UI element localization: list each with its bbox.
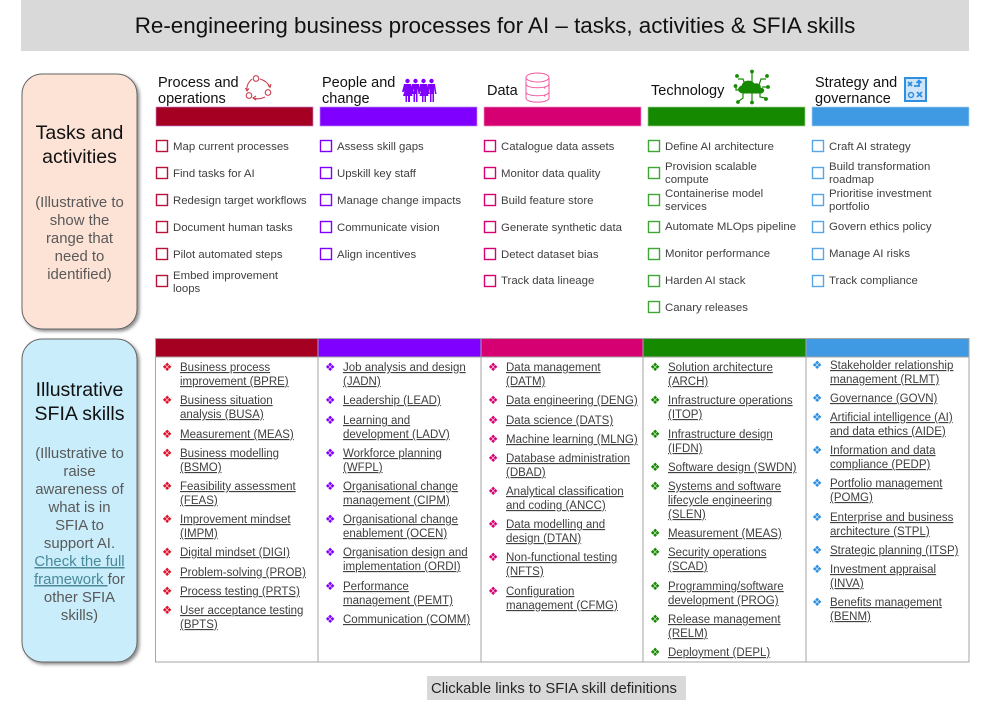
skills list: people and change: ❖	[325, 612, 335, 626]
skills list: strategy and governance: architecture (STPL)	[830, 526, 930, 538]
skills list: process and operations: ❖	[162, 603, 172, 617]
task list: process and operations: Find tasks for AI	[173, 168, 255, 180]
skills list: strategy and governance: compliance (PEDP)	[830, 459, 931, 471]
skills list: strategy and governance: Information and data	[830, 445, 936, 457]
panel: tasks and activities label	[22, 74, 137, 329]
skills list: strategy and governance: (POMG)	[830, 492, 873, 504]
skills list: strategy and governance: ❖	[812, 443, 822, 457]
skills list: data: Non-functional testing	[506, 552, 617, 564]
task list: data: Catalogue data assets	[501, 141, 615, 153]
skills list: people and change: Workforce planning	[343, 448, 442, 460]
colour bar: data	[484, 107, 641, 126]
skills list: process and operations: Improvement mindset	[180, 514, 291, 526]
task list: process and operations: loops	[173, 283, 201, 295]
skills list: technology: ❖	[650, 460, 660, 474]
skills list: technology: ❖	[650, 360, 660, 374]
task list: strategy and governance: Build transformation	[829, 161, 930, 173]
task list: people and change: Assess skill gaps	[337, 141, 424, 153]
skills list: technology	[650, 360, 797, 659]
skills list: technology: (ARCH)	[668, 376, 708, 388]
skills list: technology: Software design (SWDN)	[668, 462, 797, 474]
panel: illustrative SFIA skills label: what is in	[47, 500, 111, 516]
skills list: data: Analytical classification	[506, 486, 624, 498]
skills list: data: ❖	[488, 393, 498, 407]
task list: data: Detect dataset bias	[501, 249, 599, 261]
skills list: technology: (IFDN)	[668, 443, 703, 455]
panel: illustrative SFIA skills label: (Illustrative to	[35, 446, 124, 462]
skills list: technology: Measurement (MEAS)	[668, 528, 782, 540]
task list: process and operations: Embed improvement	[173, 270, 279, 282]
skills list: people and change: ❖	[325, 545, 335, 559]
skills list: data: Configuration	[506, 586, 574, 598]
skills list: technology: Programming/software	[668, 581, 784, 593]
skills list: people and change: development (LADV)	[343, 429, 450, 441]
colour bar: strategy	[812, 107, 969, 126]
skills list: strategy and governance: (INVA)	[830, 578, 864, 590]
task list: technology: Provision scalable	[665, 161, 757, 173]
panel: illustrative SFIA skills label: SFIA to	[55, 518, 104, 534]
task list: strategy and governance: Manage AI risks	[829, 248, 910, 260]
task list: people and change: Upskill key staff	[337, 168, 417, 180]
skills list: strategy and governance: ❖	[812, 562, 822, 576]
skills list: technology: ❖	[650, 545, 660, 559]
skills list: strategy and governance: Artificial intelligence (AI)	[830, 412, 953, 424]
task list: strategy and governance	[812, 140, 932, 287]
heading: people and change	[322, 75, 395, 107]
skills list: people and change	[325, 360, 470, 626]
skills table frame	[156, 338, 969, 662]
task list: technology: compute	[665, 174, 709, 186]
skills list: people and change: ❖	[325, 446, 335, 460]
task list: data	[484, 140, 623, 287]
skills list: technology: ❖	[650, 393, 660, 407]
skills list: strategy and governance: ❖	[812, 410, 822, 424]
heading: process and operations: operations	[158, 91, 226, 107]
skills list: strategy and governance: Investment appraisal	[830, 564, 936, 576]
task list: strategy and governance: Craft AI strategy	[829, 141, 911, 153]
skills list: process and operations: ❖	[162, 393, 172, 407]
footer note: Clickable links to SFIA skill definitions	[431, 681, 677, 697]
skills list: process and operations: improvement (BPRE)	[180, 376, 289, 388]
skills list: process and operations: ❖	[162, 512, 172, 526]
skills list: strategy and governance: Stakeholder relationship	[830, 360, 953, 372]
heading: process and operations	[158, 75, 239, 107]
skills list: process and operations: (BSMO)	[180, 462, 222, 474]
icon: people	[402, 79, 436, 102]
skills list: process and operations: (FEAS)	[180, 495, 218, 507]
skills list: process and operations: (BPTS)	[180, 619, 218, 631]
heading: people and change: People and	[322, 75, 395, 91]
skills list: process and operations: Measurement (MEAS)	[180, 429, 294, 441]
task list: process and operations	[156, 140, 307, 295]
skills list: process and operations: ❖	[162, 545, 172, 559]
task list: process and operations: Redesign target workflows	[173, 195, 307, 207]
skills list: data: Data science (DATS)	[506, 415, 613, 427]
skills list: technology: Release management	[668, 614, 781, 626]
skills list: technology: (RELM)	[668, 628, 708, 640]
skills list: data: ❖	[488, 432, 498, 446]
task list: people and change: Align incentives	[337, 249, 416, 261]
skills list: process and operations: Feasibility assessment	[180, 481, 296, 493]
skills list: process and operations: ❖	[162, 360, 172, 374]
skills list: data: (DBAD)	[506, 467, 546, 479]
skills list: data: ❖	[488, 484, 498, 498]
skills list: process and operations: analysis (BUSA)	[180, 409, 264, 421]
skills list: people and change: ❖	[325, 579, 335, 593]
task list: technology: Containerise model	[665, 188, 763, 200]
skills list: people and change: implementation (ORDI)	[343, 561, 461, 573]
skills list: technology: ❖	[650, 479, 660, 493]
skills list: technology: Infrastructure operations	[668, 395, 793, 407]
task list: technology: services	[665, 201, 707, 213]
skills list: data: ❖	[488, 413, 498, 427]
skills list: technology: Infrastructure design	[668, 429, 773, 441]
panel: illustrative SFIA skills label: raise	[63, 464, 96, 480]
skills list: technology: Security operations	[668, 547, 767, 559]
task list: technology: Automate MLOps pipeline	[665, 221, 796, 233]
skills list: data: Data modelling and	[506, 519, 605, 531]
skills list: people and change: ❖	[325, 360, 335, 374]
skills list: people and change: ❖	[325, 393, 335, 407]
task list: people and change: Communicate vision	[337, 222, 440, 234]
skills list: data: ❖	[488, 550, 498, 564]
task list: data: Track data lineage	[501, 275, 594, 287]
skills list: strategy and governance: management (RLMT)	[830, 374, 939, 386]
heading: process and operations: Process and	[158, 75, 239, 91]
skills list: data: (DATM)	[506, 376, 546, 388]
skills list: data: ❖	[488, 584, 498, 598]
skills list: technology: Deployment (DEPL)	[668, 647, 770, 659]
heading: strategy and governance: Strategy and	[815, 75, 897, 91]
task list: people and change	[320, 140, 461, 261]
skills list: data: design (DTAN)	[506, 533, 581, 545]
skills list: data: Data engineering (DENG)	[506, 395, 638, 407]
task list: technology: Define AI architecture	[665, 141, 774, 153]
panel: illustrative SFIA skills label: framework for	[34, 572, 125, 588]
skills list: data: Machine learning (MLNG)	[506, 434, 638, 446]
skills list: data: and coding (ANCC)	[506, 500, 606, 512]
task list: strategy and governance: Prioritise investment	[829, 188, 932, 200]
skills list: data: ❖	[488, 451, 498, 465]
skills list: people and change: (JADN)	[343, 376, 381, 388]
skills list: people and change: management (CIPM)	[343, 495, 450, 507]
panel: tasks and activities label: range that	[46, 231, 114, 247]
skills list: process and operations: ❖	[162, 446, 172, 460]
skills list: people and change: Organisational change	[343, 481, 458, 493]
skills list: people and change: management (PEMT)	[343, 595, 453, 607]
skills list: people and change: ❖	[325, 512, 335, 526]
task list: technology	[648, 140, 796, 314]
skills list: strategy and governance: and data ethics (AIDE)	[830, 426, 946, 438]
skills list: people and change: Learning and	[343, 415, 410, 427]
panel: tasks and activities label: need to	[55, 249, 104, 265]
skills list: technology: ❖	[650, 645, 660, 659]
skills list: process and operations: Business process	[180, 362, 270, 374]
panel: illustrative SFIA skills label: awareness of	[35, 482, 125, 498]
skills list: data: (NFTS)	[506, 566, 544, 578]
heading: strategy and governance	[815, 75, 897, 107]
skills list: process and operations: ❖	[162, 479, 172, 493]
footer note	[427, 676, 686, 700]
task list: strategy and governance: Govern ethics policy	[829, 221, 932, 233]
task list: strategy and governance: roadmap	[829, 174, 874, 186]
panel: illustrative SFIA skills label: Check the full	[34, 554, 125, 570]
colour bar: technology	[648, 107, 805, 126]
skills list: data: management (CFMG)	[506, 600, 618, 612]
skills list: people and change: enablement (OCEN)	[343, 528, 447, 540]
skills list: technology: ❖	[650, 526, 660, 540]
skills list: people and change: Job analysis and design	[343, 362, 466, 374]
skills list: technology: Systems and software	[668, 481, 781, 493]
skills list: people and change: ❖	[325, 479, 335, 493]
task list: data: Build feature store	[501, 195, 593, 207]
skills list: strategy and governance: Strategic planning (ITSP)	[830, 545, 959, 557]
task list: technology: Harden AI stack	[665, 275, 746, 287]
skills list: people and change: (WFPL)	[343, 462, 383, 474]
skills list: strategy and governance: Portfolio management	[830, 478, 943, 490]
skills list: data: ❖	[488, 360, 498, 374]
panel: tasks and activities label: identified)	[47, 267, 112, 283]
panel: illustrative SFIA skills label: skills)	[61, 608, 98, 624]
heading: people and change: change	[322, 91, 370, 107]
icon: cloud network	[734, 70, 769, 104]
task list: data: Monitor data quality	[501, 168, 601, 180]
icon: database	[526, 73, 549, 102]
title banner	[21, 0, 969, 51]
skills list: process and operations: ❖	[162, 565, 172, 579]
task list: strategy and governance: portfolio	[829, 201, 870, 213]
skills list: process and operations: ❖	[162, 584, 172, 598]
skills list: technology: ❖	[650, 427, 660, 441]
skills list: process and operations: Business modelling	[180, 448, 279, 460]
skills list: people and change: ❖	[325, 413, 335, 427]
title banner: Re-engineering business processes for AI – tasks, activities & SFIA skills	[135, 13, 855, 38]
skills list: process and operations: Problem-solving (PROB)	[180, 567, 306, 579]
skills list: strategy and governance: ❖	[812, 543, 822, 557]
skills list: process and operations: (IMPM)	[180, 528, 218, 540]
skills list: process and operations	[162, 360, 306, 631]
skills list: people and change: Organisation design and	[343, 547, 468, 559]
colour bar: process	[156, 107, 313, 126]
skills list: strategy and governance: ❖	[812, 595, 822, 609]
panel: illustrative SFIA skills label: SFIA skills	[35, 403, 125, 425]
task list: technology: Monitor performance	[665, 248, 770, 260]
task list: process and operations: Pilot automated steps	[173, 249, 283, 261]
skills list: strategy and governance: Governance (GOVN)	[830, 393, 938, 405]
skills list: process and operations: Business situation	[180, 395, 273, 407]
skills list: people and change: Leadership (LEAD)	[343, 395, 441, 407]
skills list: process and operations: Process testing (PRTS)	[180, 586, 300, 598]
skills list: strategy and governance: Enterprise and business	[830, 512, 954, 524]
panel: tasks and activities label: activities	[42, 146, 117, 168]
skills list: data: Database administration	[506, 453, 630, 465]
panel: tasks and activities label: show the	[50, 213, 109, 229]
skills list: technology: development (PROG)	[668, 595, 779, 607]
skills list: strategy and governance: ❖	[812, 391, 822, 405]
skills list: data: Data management	[506, 362, 601, 374]
skills list: people and change: Organisational change	[343, 514, 458, 526]
panel: tasks and activities label: Tasks and	[36, 122, 123, 144]
panel: illustrative SFIA skills label: Illustrative	[36, 379, 123, 401]
task list: strategy and governance: Track compliance	[829, 275, 918, 287]
skills list: strategy and governance: (BENM)	[830, 611, 871, 623]
skills list: technology: Solution architecture	[668, 362, 773, 374]
panel: illustrative SFIA skills label: support AI.	[44, 536, 115, 552]
task list: technology: Canary releases	[665, 302, 748, 314]
task list: process and operations: Map current processes	[173, 141, 289, 153]
skills list: process and operations: ❖	[162, 427, 172, 441]
skills list: people and change: Performance	[343, 581, 409, 593]
skills list: strategy and governance: ❖	[812, 510, 822, 524]
task list: data: Generate synthetic data	[501, 222, 623, 234]
heading: technology: Technology	[651, 83, 725, 99]
panel: illustrative SFIA skills label	[22, 339, 137, 662]
icon: process cycle	[246, 76, 271, 100]
heading: data: Data	[487, 83, 519, 99]
colour bar: people	[320, 107, 477, 126]
skills list: strategy and governance: ❖	[812, 476, 822, 490]
skills list: people and change: Communication (COMM)	[343, 614, 470, 626]
skills list: technology: lifecycle engineering	[668, 495, 772, 507]
skills list: strategy and governance: Benefits management	[830, 597, 943, 609]
skills list: technology: ❖	[650, 612, 660, 626]
skills list: technology: (SCAD)	[668, 561, 708, 573]
panel: illustrative SFIA skills label: other SFIA	[44, 590, 115, 606]
panel: tasks and activities label: (Illustrative to	[35, 195, 124, 211]
skills list: technology: (SLEN)	[668, 509, 706, 521]
icon: strategy board	[905, 78, 926, 101]
task list: process and operations: Document human tasks	[173, 222, 293, 234]
skills list: process and operations: Digital mindset (DIGI)	[180, 547, 290, 559]
skills list: strategy and governance: ❖	[812, 358, 822, 372]
skills list: process and operations: User acceptance testing	[180, 605, 303, 617]
skills list: data: ❖	[488, 517, 498, 531]
skills list: technology: ❖	[650, 579, 660, 593]
skills list: strategy and governance	[812, 358, 959, 623]
task list: people and change: Manage change impacts	[337, 195, 461, 207]
skills list: technology: (ITOP)	[668, 409, 702, 421]
skills list: data	[488, 360, 638, 612]
heading: strategy and governance: governance	[815, 91, 891, 107]
